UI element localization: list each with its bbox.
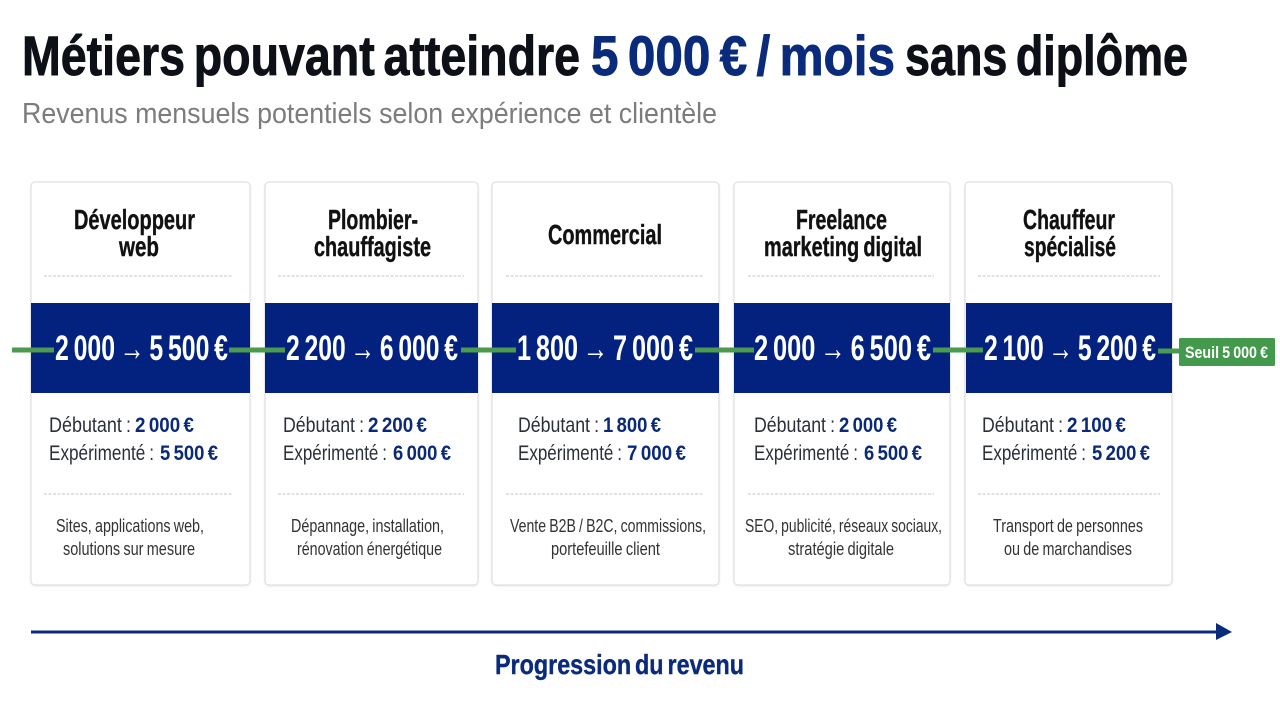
title: sans diplôme [905, 24, 1188, 87]
threshold line [12, 350, 1180, 351]
levels: 6 500 € [864, 442, 922, 465]
description [291, 515, 444, 559]
levels: Débutant : [982, 414, 1063, 437]
levels: 2 000 € [135, 414, 194, 437]
levels [754, 414, 922, 465]
panel: Plombier-chauffagiste [265, 182, 478, 585]
levels [982, 414, 1150, 465]
salary band [31, 303, 250, 393]
salary band: 1 800 → 7 000 € [517, 329, 693, 368]
description [510, 515, 706, 559]
salary band [492, 303, 719, 393]
description: Dépannage, installation, [291, 515, 444, 536]
job title: Chauffeur [1023, 204, 1115, 235]
panel: Commercial [492, 182, 719, 585]
description: Vente B2B / B2C, commissions, [510, 515, 706, 536]
description: portefeuille client [551, 538, 660, 559]
levels: Expérimenté : [49, 442, 154, 465]
job title: Plombier- [328, 204, 418, 235]
salary band [734, 303, 950, 393]
levels: Expérimenté : [754, 442, 858, 465]
job title [314, 204, 431, 262]
levels: Débutant : [49, 414, 131, 437]
job title: spécialisé [1024, 231, 1116, 262]
job title: marketing digital [764, 231, 922, 262]
job title: Commercial [548, 219, 662, 250]
salary band [966, 303, 1172, 393]
job title [1023, 204, 1116, 262]
title: 5 000 € / mois [591, 24, 895, 87]
levels: 5 500 € [160, 442, 218, 465]
title [22, 24, 1188, 87]
levels [283, 414, 451, 465]
levels [518, 414, 686, 465]
levels: Débutant : [283, 414, 364, 437]
description: rénovation énergétique [297, 538, 442, 559]
subtitle: Revenus mensuels potentiels selon expérience et clientèle [22, 98, 717, 130]
levels: Expérimenté : [982, 442, 1086, 465]
job title: chauffagiste [314, 231, 431, 262]
job title: Freelance [796, 204, 887, 235]
description [56, 515, 204, 559]
job title [74, 204, 195, 262]
panel: Chauffeur spécialisé [965, 182, 1172, 585]
salary band: 2 000 → 6 500 € [754, 329, 931, 368]
description: solutions sur mesure [63, 538, 195, 559]
description [993, 515, 1143, 559]
levels [49, 414, 218, 465]
description: Sites, applications web, [56, 515, 204, 536]
levels: 2 200 € [368, 414, 427, 437]
levels: 1 800 € [603, 414, 661, 437]
levels: 2 100 € [1067, 414, 1126, 437]
levels: Débutant : [518, 414, 599, 437]
levels: Expérimenté : [518, 442, 622, 465]
axis label: Progression du revenu [495, 649, 744, 680]
description [745, 515, 942, 559]
description: ou de marchandises [1004, 538, 1132, 559]
levels: 6 000 € [393, 442, 451, 465]
threshold badge [1179, 338, 1275, 366]
levels: 2 000 € [839, 414, 897, 437]
panel: Freelance marketing digital [734, 182, 950, 585]
description: SEO, publicité, réseaux sociaux, [745, 515, 942, 536]
salary band: 2 100 → 5 200 € [984, 329, 1156, 368]
levels: 7 000 € [627, 442, 686, 465]
levels: 5 200 € [1092, 442, 1150, 465]
salary band: 2 000 → 5 500 € [55, 329, 228, 368]
levels: Débutant : [754, 414, 835, 437]
job title: web [118, 231, 159, 262]
job title [764, 204, 922, 262]
salary band: 2 200 → 6 000 € [286, 329, 458, 368]
job title: Développeur [74, 204, 195, 235]
title: Métiers pouvant atteindre [22, 24, 580, 87]
panel: Développeur web [31, 182, 250, 585]
description: stratégie digitale [788, 538, 894, 559]
description: Transport de personnes [993, 515, 1143, 536]
arrow: revenue progression [31, 623, 1232, 640]
levels: Expérimenté : [283, 442, 387, 465]
salary band [265, 303, 478, 393]
